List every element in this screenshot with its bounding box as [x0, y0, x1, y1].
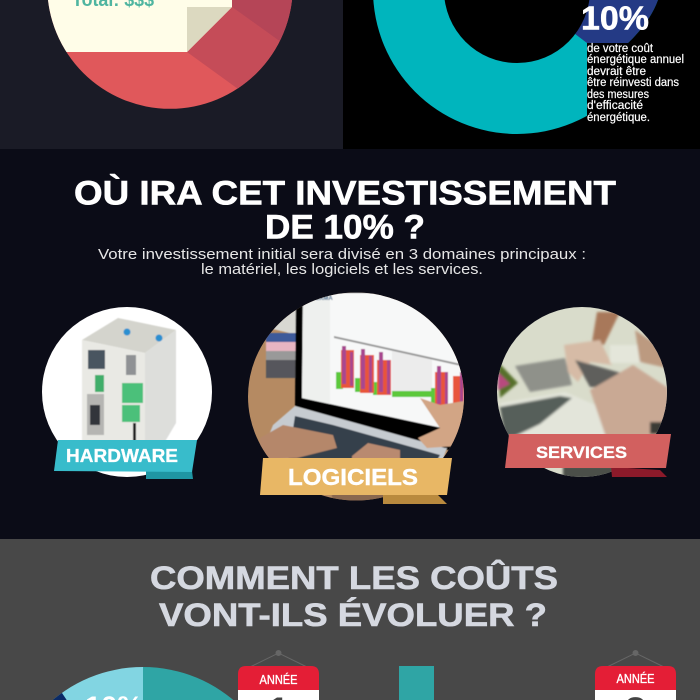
panel: how costs evolve	[0, 539, 700, 700]
text: donut caption: énergétique annuel	[587, 54, 684, 66]
heading: investment	[74, 174, 616, 246]
text: donut caption: énergétique.	[587, 112, 650, 124]
text: donut caption: de votre coût	[587, 43, 654, 55]
heading: costs	[150, 560, 558, 633]
photo: hands with phone and laptop	[497, 307, 672, 480]
pie chart: cost evolution	[52, 667, 234, 700]
text: intro: Votre investissement initial sera divisé en 3 domaines principaux :	[98, 247, 586, 263]
card: services	[497, 307, 672, 480]
photo: laptop with energy dashboard	[248, 292, 464, 500]
text: intro: le matériel, les logiciels et les services.	[201, 262, 483, 278]
text: donut caption	[587, 43, 684, 124]
pie chart: cost shares	[48, 0, 292, 109]
heading: costs: VONT-ILS ÉVOLUER ?	[159, 597, 547, 633]
donut chart	[373, 0, 700, 149]
ribbon: services: SERVICES	[536, 443, 627, 462]
ribbon: logiciels: LOGICIELS	[288, 464, 418, 490]
text: donut caption: devrait être	[587, 66, 646, 78]
panel: where the investment goes	[42, 174, 671, 504]
heading: costs: COMMENT LES COÛTS	[150, 560, 558, 596]
calendar: year 1: ANNÉE	[260, 672, 298, 687]
calendar: year 2: ANNÉE	[616, 671, 654, 686]
photo: controller device	[42, 307, 212, 477]
text: 10%: 10%	[581, 0, 649, 36]
text: donut caption: être réinvesti dans	[587, 77, 679, 89]
panel: total cost pie	[0, 0, 343, 149]
bar: teal column	[399, 666, 434, 700]
card: software	[248, 288, 480, 504]
heading: investment: DE 10% ?	[265, 208, 425, 246]
ribbon: hardware	[54, 440, 197, 479]
ribbon: hardware: HARDWARE	[66, 446, 178, 466]
ribbon: services	[505, 434, 671, 477]
photo: laptop with energy dashboard: DEXMA	[311, 296, 333, 302]
text: donut caption: d'efficacité	[587, 100, 643, 112]
ribbon: logiciels	[260, 458, 452, 504]
text: donut caption: des mesures	[587, 89, 649, 101]
panel: ten percent donut	[343, 0, 700, 149]
card: hardware	[42, 307, 212, 479]
calendar: year 2	[595, 650, 676, 700]
text: intro	[98, 247, 586, 278]
heading: investment: OÙ IRA CET INVESTISSEMENT	[74, 174, 616, 212]
calendar: year 1	[238, 650, 319, 700]
